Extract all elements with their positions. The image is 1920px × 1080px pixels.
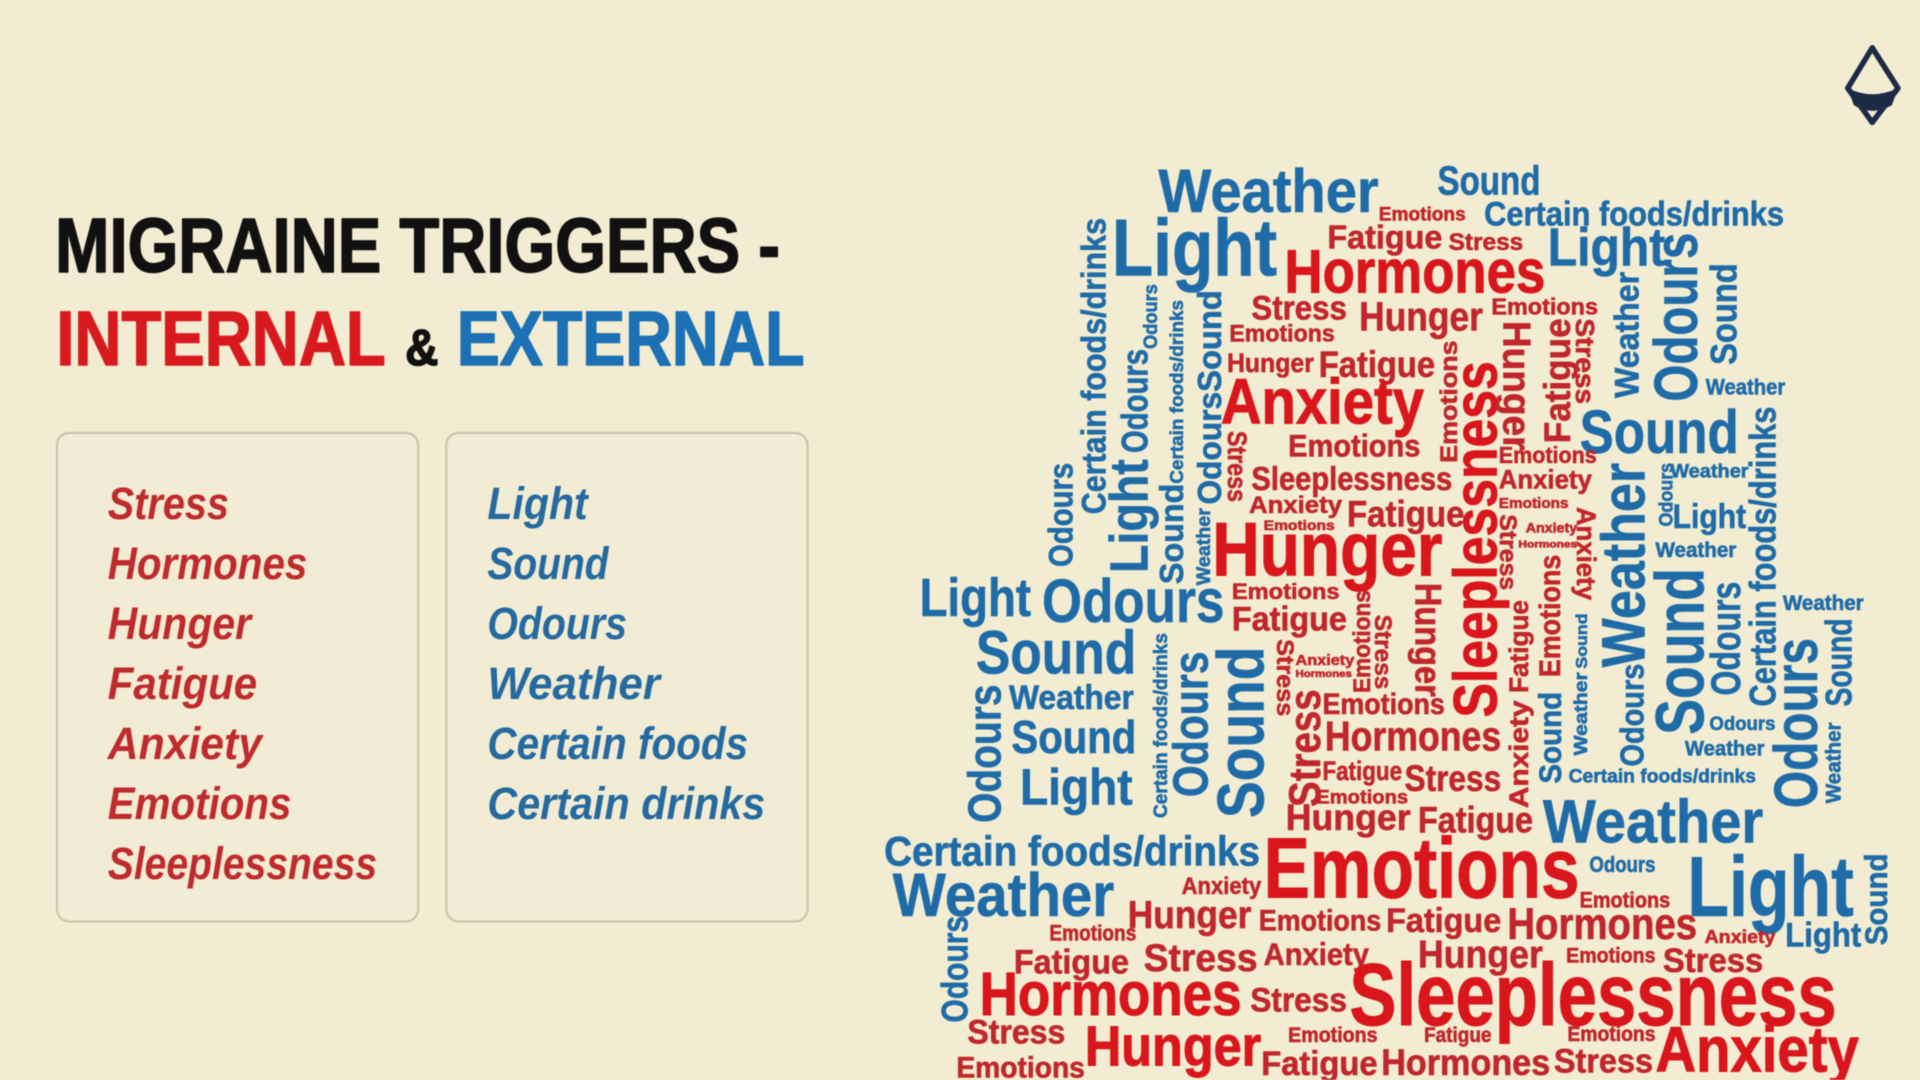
word cloud: internal triggers in red: Stress — [1281, 689, 1330, 807]
word cloud: external triggers in blue: Odours — [1589, 852, 1656, 877]
word cloud: internal triggers in red: Emotions — [1264, 821, 1580, 917]
word cloud: internal triggers in red: Hormones — [1518, 539, 1578, 550]
word cloud: internal triggers in red: Fatigue — [1424, 1024, 1491, 1047]
word cloud: external triggers in blue: Sound — [1858, 853, 1894, 945]
word cloud: internal triggers in red: Stress — [1404, 758, 1501, 799]
panel: external triggers: Odours — [487, 598, 627, 649]
word cloud: external triggers in blue: Sound — [1641, 568, 1718, 735]
word cloud: internal triggers in red: Stress — [1222, 431, 1252, 502]
word cloud: internal triggers in red: Emotions — [1229, 321, 1335, 348]
word cloud: external triggers in blue: Odours — [934, 916, 975, 1022]
word cloud: internal triggers in red: Emotions — [1264, 518, 1335, 533]
word cloud: external triggers in blue: Weather — [1608, 272, 1646, 398]
word cloud: external triggers in blue: Weather — [1656, 539, 1736, 562]
word cloud: internal triggers in red: Fatigue — [1418, 800, 1533, 841]
word cloud: internal triggers in red: Fatigue — [1386, 902, 1501, 940]
word cloud: internal triggers in red: Fatigue — [1319, 344, 1435, 385]
word cloud: external triggers in blue: Certain foods/drinks — [884, 828, 1260, 875]
panel: external triggers: Light — [487, 478, 589, 529]
word cloud: external triggers in blue: Odours — [1762, 638, 1830, 808]
word cloud: external triggers in blue: Odours — [1656, 463, 1678, 527]
word cloud: internal triggers in red: Anxiety — [1499, 465, 1592, 495]
word cloud: external triggers in blue: Weather — [1670, 461, 1749, 483]
word cloud: internal triggers in red: Fatigue — [1347, 494, 1464, 535]
word cloud: external triggers in blue: Sound — [1205, 647, 1279, 818]
word cloud: external triggers in blue: Odours — [1192, 392, 1229, 504]
word cloud: internal triggers in red — [956, 203, 1859, 1080]
panel: external triggers: Certain drinks — [487, 778, 765, 829]
word cloud: internal triggers in red: Hormones — [1284, 238, 1545, 306]
word cloud: external triggers in blue: Sound — [976, 618, 1136, 686]
panel: external triggers: Weather — [487, 658, 662, 709]
panel: internal triggers: Stress — [108, 478, 229, 529]
word cloud: internal triggers in red: Stress — [1554, 1043, 1653, 1080]
word cloud: internal triggers in red: Stress — [1494, 514, 1521, 590]
word cloud: external triggers in blue: Light — [1099, 459, 1159, 573]
word cloud: external triggers in blue: Sound — [1532, 692, 1568, 784]
word cloud: internal triggers in red: Hunger — [1359, 294, 1483, 340]
panel: internal triggers: Emotions — [108, 778, 291, 829]
word cloud: external triggers in blue: Sound — [1580, 398, 1739, 466]
title — [55, 203, 804, 382]
word cloud: internal triggers in red: Emotions — [1049, 920, 1136, 945]
word cloud: internal triggers in red: Stress — [1449, 229, 1523, 256]
word cloud: internal triggers in red: Hormones — [1507, 900, 1697, 949]
word cloud: internal triggers in red: Fatigue — [1232, 601, 1347, 639]
panel: internal triggers: Anxiety — [107, 718, 265, 769]
title: INTERNAL — [56, 296, 386, 382]
word cloud: external triggers in blue: Weather — [1158, 157, 1379, 225]
word cloud: internal triggers in red: Hunger — [1227, 348, 1314, 378]
word cloud: internal triggers in red: Hunger — [1212, 508, 1442, 593]
word cloud: external triggers in blue: Weather — [1822, 722, 1845, 803]
word cloud: external triggers in blue: Weather — [1543, 787, 1763, 855]
word cloud: external triggers in blue: Odours — [1709, 713, 1776, 735]
word cloud: external triggers in blue: Weather — [1783, 592, 1864, 615]
word cloud: internal triggers in red: Anxiety — [1221, 367, 1425, 438]
word cloud: external triggers in blue: Weather — [1685, 738, 1764, 761]
word cloud: internal triggers in red: Emotions — [1322, 688, 1445, 721]
word cloud: external triggers in blue: Odours — [1140, 284, 1162, 349]
panel: internal triggers: Sleeplessness — [108, 838, 377, 889]
word cloud: internal triggers in red: Anxiety — [1249, 492, 1342, 519]
word cloud: external triggers in blue: Light — [1687, 839, 1854, 935]
word cloud: internal triggers in red: Emotions — [1499, 442, 1597, 468]
word cloud: internal triggers in red: Stress — [1570, 318, 1598, 404]
word cloud: internal triggers in red: Anxiety — [1704, 926, 1776, 947]
word cloud: external triggers in blue: Light — [1112, 204, 1277, 294]
word cloud: internal triggers in red: Stress — [1663, 942, 1763, 980]
word cloud: internal triggers in red: Stress — [1251, 290, 1347, 328]
word cloud: internal triggers in red: Emotions — [1288, 1024, 1378, 1047]
word cloud: internal triggers in red: Emotions — [1259, 905, 1381, 938]
word cloud: internal triggers in red: Hunger — [1418, 933, 1543, 976]
word cloud: internal triggers in red: Stress — [1250, 981, 1347, 1019]
word cloud: internal triggers in red: Anxiety — [1264, 936, 1369, 972]
word cloud: internal triggers in red: Hunger — [1408, 583, 1449, 697]
word cloud: internal triggers in red: Anxiety — [1526, 521, 1578, 536]
panel: internal triggers: Hunger — [108, 598, 253, 649]
word cloud: internal triggers in red: Hunger — [1085, 1014, 1261, 1077]
word cloud: internal triggers in red: Emotions — [1580, 887, 1670, 912]
word cloud: external triggers in blue: Odours — [1702, 582, 1749, 696]
word cloud: external triggers in blue: Certain foods/drinks — [1166, 300, 1187, 484]
word cloud: external triggers in blue: Sound — [1438, 158, 1540, 204]
panel: external triggers: Certain foods — [487, 718, 748, 769]
word cloud: external triggers in blue: Weather — [1009, 679, 1134, 717]
word cloud: external triggers in blue: Certain foods/drinks — [1150, 633, 1172, 818]
word cloud: external triggers in blue: Sound — [1703, 263, 1744, 365]
word cloud: internal triggers in red: Anxiety — [1296, 653, 1355, 669]
icon: logo — [1848, 48, 1898, 122]
word cloud: internal triggers in red: Stress — [1271, 639, 1298, 716]
word cloud: external triggers in blue: Odours — [1164, 651, 1218, 797]
word cloud: internal triggers in red: Emotions — [1534, 555, 1567, 677]
word cloud: internal triggers in red: Emotions — [1491, 294, 1598, 320]
title: EXTERNAL — [457, 296, 804, 382]
word cloud: external triggers in blue: Odours — [1642, 233, 1710, 402]
word cloud: internal triggers in red: Stress — [967, 1013, 1065, 1051]
panel: internal triggers: Hormones — [108, 538, 307, 589]
word cloud: internal triggers in red: Hunger — [1128, 894, 1251, 937]
title: & — [405, 318, 438, 376]
word cloud: external triggers in blue: Weather — [1570, 672, 1591, 756]
word cloud: external triggers in blue: Light — [1785, 917, 1861, 955]
word cloud: external triggers in blue: Certain foods/drinks — [1743, 407, 1784, 707]
word cloud: internal triggers in red: Stress — [1369, 615, 1396, 689]
word cloud: internal triggers in red: Emotions — [1499, 496, 1569, 512]
word cloud: internal triggers in red: Fatigue — [1322, 756, 1402, 786]
word cloud: internal triggers in red: Hunger — [1495, 321, 1538, 451]
word cloud: internal triggers in red: Emotions — [1316, 786, 1408, 808]
word cloud: internal triggers in red: Anxiety — [1571, 507, 1601, 600]
word cloud: internal triggers in red: Emotions — [1379, 203, 1466, 225]
word cloud: external triggers in blue: Sound — [1192, 290, 1229, 392]
word cloud: internal triggers in red: Hormones — [1325, 713, 1501, 760]
panel: external triggers: Sound — [487, 538, 610, 589]
word cloud: internal triggers in red: Emotions — [1232, 579, 1340, 604]
word cloud: external triggers in blue: Sound — [1154, 484, 1191, 584]
word cloud: internal triggers in red: Stress — [1144, 937, 1258, 980]
word cloud: external triggers in blue: Certain foods/drinks — [1484, 195, 1784, 233]
word cloud: external triggers in blue — [884, 157, 1894, 1022]
word cloud: internal triggers in red: Fatigue — [1537, 318, 1578, 443]
word cloud: external triggers in blue: Light — [1548, 218, 1665, 278]
panel: external triggers — [446, 433, 808, 921]
word cloud: internal triggers in red: Sleeplessness — [1441, 361, 1509, 718]
word cloud: internal triggers in red: Fatigue — [1327, 220, 1442, 257]
word cloud: internal triggers in red: Hormones — [1296, 669, 1352, 680]
word cloud: internal triggers in red: Fatigue — [1504, 600, 1534, 693]
word cloud: external triggers in blue: Weather — [1706, 374, 1786, 399]
word cloud: external triggers in blue: Sound — [1011, 711, 1136, 763]
word cloud: external triggers in blue: Sound — [1574, 613, 1591, 669]
word cloud: external triggers in blue: Odours — [1114, 349, 1155, 453]
word cloud: external triggers in blue: Odours — [958, 684, 1010, 823]
word cloud: external triggers in blue: Odours — [1042, 567, 1224, 635]
word cloud: external triggers in blue: Light — [1020, 757, 1133, 815]
word cloud: external triggers in blue: Certain foods/drinks — [1076, 218, 1114, 514]
word cloud: internal triggers in red: Hormones — [980, 960, 1242, 1028]
panel: internal triggers — [57, 433, 418, 921]
word cloud: external triggers in blue: Sound — [1818, 618, 1859, 707]
word cloud: internal triggers in red: Anxiety — [1182, 873, 1262, 900]
word cloud: internal triggers in red: Hunger — [1286, 797, 1411, 838]
word cloud: internal triggers in red: Emotions — [1349, 590, 1376, 693]
word cloud: external triggers in blue: Light — [920, 568, 1031, 628]
word cloud: external triggers in blue: Odours — [1614, 664, 1651, 767]
title: MIGRAINE TRIGGERS - — [55, 203, 780, 289]
word cloud: external triggers in blue: Light — [1673, 498, 1746, 536]
word cloud: internal triggers in red: Fatigue — [1014, 943, 1129, 981]
word cloud: external triggers in blue: Odours — [1043, 463, 1081, 567]
word cloud: external triggers in blue: Certain foods/drinks — [1569, 765, 1756, 787]
word cloud: internal triggers in red: Anxiety — [1504, 700, 1534, 808]
word cloud: internal triggers in red: Emotions — [1436, 340, 1463, 463]
word cloud: internal triggers in red: Sleeplessness — [1251, 461, 1452, 498]
word cloud: external triggers in blue: Weather — [1589, 463, 1657, 667]
word cloud: internal triggers in red: Emotions — [1567, 1023, 1656, 1046]
panel: internal triggers: Fatigue — [108, 658, 257, 709]
word cloud: external triggers in blue: Weather — [1193, 508, 1215, 585]
word cloud: internal triggers in red: Emotions — [1566, 944, 1656, 967]
word cloud: internal triggers in red: Emotions — [1288, 428, 1420, 464]
word cloud: external triggers in blue: Weather — [893, 861, 1114, 929]
